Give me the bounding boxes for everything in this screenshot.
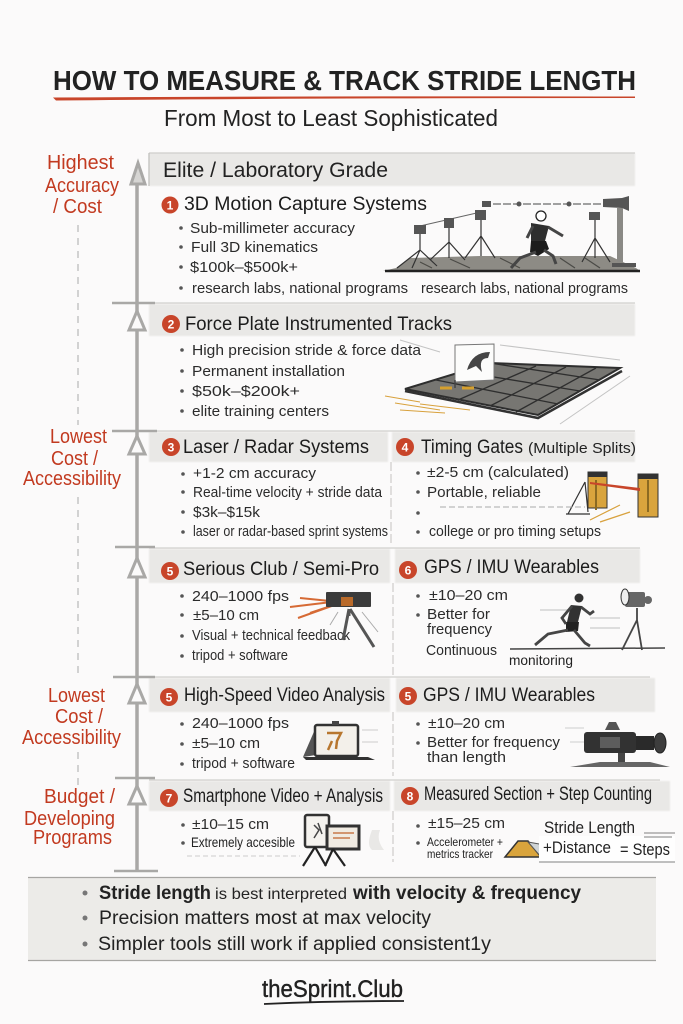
- illustration: motion capture rig and runner: [383, 196, 640, 271]
- panel: timing gates: college or pro timing setups: [429, 523, 601, 540]
- illustration: sprinter and camera tripod: [510, 589, 665, 650]
- panel: serious club / semi-pro: Visual + technical feedback: [192, 627, 350, 644]
- panel: measured section + step counting: Accelerometer +: [427, 835, 503, 849]
- callout: stride length formula: [539, 818, 675, 862]
- scale label: lowest cost / accessibility: Cost /: [51, 448, 98, 470]
- panel: measured section + step counting: 8: [407, 790, 414, 804]
- title: HOW TO MEASURE & TRACK STRIDE LENGTH: [53, 65, 636, 96]
- panel: GPS / IMU wearables second: than length: [427, 749, 506, 766]
- panel: smartphone video + analysis: Extremely accesible: [191, 834, 295, 850]
- panel: GPS / IMU wearables first: 6: [405, 564, 412, 578]
- scale label: lowest cost / accessibility: Accessibility: [23, 468, 121, 490]
- panel: timing gates: [396, 437, 636, 540]
- panel: timing gates: ±2-5 cm (calculated): [427, 464, 569, 481]
- panel: high-speed video analysis: 5: [166, 690, 173, 704]
- illustration: wearable tracker device: [505, 841, 545, 857]
- panel: GPS / IMU wearables first: [399, 557, 599, 668]
- panel: 3D motion capture: [162, 194, 628, 297]
- panel: GPS / IMU wearables second: 5: [405, 690, 412, 704]
- panel: force plate instrumented tracks: $50k–$200k+: [192, 383, 300, 400]
- panel: high-speed video analysis: High-Speed Video Analysis: [184, 685, 385, 706]
- scale label: lowest cost / accessibility: Lowest: [50, 426, 107, 448]
- panel: timing gates: (Multiple Splits): [528, 440, 636, 457]
- panel: smartphone video + analysis: [160, 786, 383, 850]
- panel: measured section + step counting: metrics tracker: [427, 847, 493, 861]
- scale label: lowest cost / accessibility second: Accessibility: [22, 727, 121, 749]
- panel: timing gates: Timing Gates: [421, 437, 523, 458]
- panel: force plate instrumented tracks: elite training centers: [192, 403, 329, 420]
- illustration: timing gate posts and beam: [440, 472, 658, 522]
- scale label: budget / developing programs: Budget /: [44, 786, 115, 808]
- scale label: highest accuracy / cost: Highest: [47, 152, 114, 174]
- panel: serious club / semi-pro: [161, 559, 379, 664]
- panel: laser / radar systems: 3: [168, 440, 175, 454]
- panel: key takeaways: Simpler tools still work if applied consistent1y: [98, 934, 492, 955]
- panel: laser / radar systems: $3k–$15k: [193, 504, 261, 521]
- panel: laser / radar systems: [162, 437, 388, 540]
- scale label: lowest cost / accessibility: [23, 426, 121, 490]
- panel: GPS / IMU wearables first: Better for: [427, 606, 490, 623]
- illustration: tablet with video analysis: [303, 721, 378, 760]
- panel: serious club / semi-pro: Serious Club / Semi-Pro: [183, 559, 379, 580]
- panel: key takeaways: Stride length: [99, 883, 211, 904]
- scale label: budget / developing programs: Developing: [24, 808, 115, 830]
- illustration: smartphone and tablet on tripods: [187, 815, 384, 866]
- panel: smartphone video + analysis: 7: [166, 792, 173, 806]
- panel: smartphone video + analysis: ±10–15 cm: [192, 816, 269, 833]
- illustration: large video camera: [565, 722, 670, 767]
- panel: GPS / IMU wearables second: GPS / IMU Wearables: [423, 685, 595, 706]
- panel: force plate instrumented tracks: High precision stride & force data: [192, 342, 422, 359]
- illustration: high-speed camera on tripod: [290, 592, 378, 647]
- panel: high-speed video analysis: tripod + software: [192, 755, 295, 772]
- panel: laser / radar systems: laser or radar-based sprint systems: [193, 523, 388, 540]
- subtitle: From Most to Least Sophisticated: [164, 105, 498, 131]
- panel: GPS / IMU wearables first: GPS / IMU Wearables: [424, 557, 599, 578]
- panel: GPS / IMU wearables first: Continuous: [426, 642, 497, 659]
- callout: stride length formula: Stride Length: [544, 818, 635, 837]
- panel: serious club / semi-pro: ±5–10 cm: [193, 607, 259, 624]
- scale label: budget / developing programs: [24, 786, 115, 849]
- scale label: highest accuracy / cost: / Cost: [53, 196, 102, 218]
- callout: stride length formula: = Steps: [620, 840, 670, 859]
- panel: smartphone video + analysis: Smartphone Video + Analysis: [183, 786, 383, 807]
- panel: force plate instrumented tracks: Permanent installation: [192, 363, 345, 380]
- panel: 3D motion capture: 3D Motion Capture Systems: [184, 194, 427, 215]
- panel: timing gates: Portable, reliable: [427, 484, 541, 501]
- scale label: highest accuracy / cost: Accuracy: [45, 175, 119, 197]
- panel: measured section + step counting: ±15–25 cm: [428, 815, 505, 832]
- panel: key takeaways: [28, 877, 656, 961]
- panel: 3D motion capture: Full 3D kinematics: [191, 239, 318, 256]
- panel: serious club / semi-pro: 240–1000 fps: [192, 588, 289, 605]
- panel: laser / radar systems: Real-time velocity + stride data: [193, 484, 383, 501]
- panel: key takeaways: with velocity & frequency: [352, 883, 581, 904]
- panel: 3D motion capture: research labs, national programs: [421, 280, 628, 297]
- scale label: lowest cost / accessibility second: Cost /: [55, 706, 103, 728]
- panel: GPS / IMU wearables first: ±10–20 cm: [429, 587, 508, 604]
- panel: GPS / IMU wearables second: Better for frequency: [427, 734, 561, 751]
- panel: serious club / semi-pro: tripod + software: [192, 647, 288, 664]
- panel: 3D motion capture: Sub-millimeter accuracy: [190, 220, 356, 237]
- panel: GPS / IMU wearables second: ±10–20 cm: [428, 715, 505, 732]
- panel: GPS / IMU wearables first: monitoring: [509, 652, 573, 668]
- scale label: highest accuracy / cost: [45, 152, 119, 218]
- panel: high-speed video analysis: [160, 685, 385, 772]
- panel: GPS / IMU wearables first: frequency: [427, 621, 492, 638]
- footer brand: theSprint.Club: [262, 976, 403, 1003]
- panel: force plate instrumented tracks: [162, 314, 452, 420]
- scale label: budget / developing programs: Programs: [33, 827, 112, 849]
- panel: force plate instrumented tracks: 2: [168, 318, 175, 332]
- panel: 3D motion capture: 1: [167, 198, 174, 212]
- vertical accuracy arrow axis: [112, 163, 158, 871]
- scale label: lowest cost / accessibility second: Lowest: [48, 685, 105, 707]
- scale label: lowest cost / accessibility second: [22, 685, 121, 749]
- panel: key takeaways: is best interpreted: [215, 886, 347, 903]
- panel: serious club / semi-pro: 5: [167, 564, 174, 578]
- panel: high-speed video analysis: 240–1000 fps: [192, 715, 289, 732]
- panel: high-speed video analysis: ±5–10 cm: [192, 735, 260, 752]
- panel: 3D motion capture: $100k–$500k+: [190, 259, 298, 276]
- panel: GPS / IMU wearables second: [399, 685, 595, 766]
- section bars: [149, 153, 670, 811]
- panel: measured section + step counting: [401, 784, 652, 861]
- heading: elite / laboratory grade: Elite / Laboratory Grade: [163, 159, 388, 182]
- panel: laser / radar systems: Laser / Radar Systems: [183, 437, 369, 458]
- panel: 3D motion capture: research labs, national programs: [192, 280, 408, 297]
- panel: laser / radar systems: +1-2 cm accuracy: [193, 465, 317, 482]
- panel: key takeaways: Precision matters most at max velocity: [99, 908, 432, 929]
- callout: stride length formula: +Distance: [543, 838, 611, 857]
- illustration: force plate grid: [385, 340, 630, 424]
- panel: force plate instrumented tracks: Force Plate Instrumented Tracks: [185, 314, 452, 335]
- panel: timing gates: 4: [402, 440, 409, 454]
